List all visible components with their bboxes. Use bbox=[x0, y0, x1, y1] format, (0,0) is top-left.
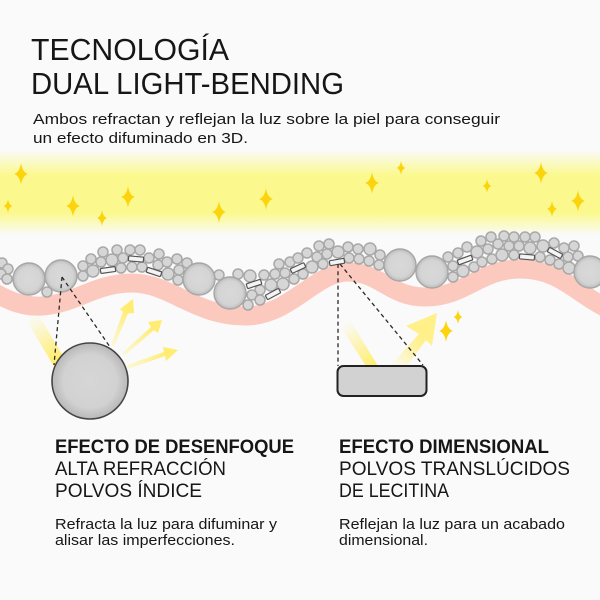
description: dimensional effect bbox=[339, 517, 565, 549]
flake particle enlarged bbox=[338, 366, 426, 396]
intro text: un efecto difuminado en 3D. bbox=[33, 130, 248, 147]
description: blur effect: alisar las imperfecciones. bbox=[55, 533, 235, 549]
skin layer bbox=[0, 269, 600, 316]
description: dimensional effect: dimensional. bbox=[339, 533, 428, 549]
subheading: translucent lecithin powders: DE LECITINA bbox=[339, 481, 449, 502]
sphere powder particle enlarged bbox=[52, 343, 128, 419]
intro text: Ambos refractan y reflejan la luz sobre la piel para conseguir bbox=[33, 111, 500, 128]
dashed zoom lines: sphere bbox=[54, 277, 110, 365]
icon: reflected sparkles bbox=[439, 310, 462, 342]
subheading: high refraction powders bbox=[55, 458, 226, 502]
large powder particles bbox=[13, 249, 600, 309]
icon: sparkles in light band bbox=[4, 161, 585, 226]
arrow: refracted light 2 bbox=[122, 320, 162, 356]
yellow light band bbox=[0, 150, 600, 235]
small powder particles bbox=[0, 231, 583, 310]
translucent lecithin flakes bbox=[100, 247, 563, 300]
dashed zoom lines: flake bbox=[338, 264, 423, 366]
subheading: high refraction powders: ALTA REFRACCIÓN bbox=[55, 458, 226, 480]
panel: blur effect text bbox=[55, 437, 294, 549]
heading: dimensional effect: EFECTO DIMENSIONAL bbox=[339, 437, 549, 458]
incoming light beam: blur effect bbox=[26, 314, 63, 368]
heading: blur effect: EFECTO DE DESENFOQUE bbox=[55, 437, 294, 458]
panel: dimensional effect text bbox=[339, 437, 570, 549]
arrow: refracted light 1 bbox=[111, 299, 134, 347]
description: blur effect: Refracta la luz para difuminar y bbox=[55, 517, 278, 533]
title: DUAL LIGHT-BENDING bbox=[31, 66, 344, 101]
subheading: translucent lecithin powders bbox=[339, 458, 570, 502]
description: blur effect bbox=[55, 517, 278, 549]
title: TECNOLOGÍA bbox=[31, 32, 229, 67]
arrow: refracted light 3 bbox=[127, 347, 178, 369]
description: dimensional effect: Reflejan la luz para un acabado bbox=[339, 517, 565, 533]
subheading: high refraction powders: POLVOS ÍNDICE bbox=[55, 481, 202, 502]
title bbox=[31, 32, 344, 101]
incoming light beam: dimensional effect bbox=[340, 320, 378, 366]
subheading: translucent lecithin powders: POLVOS TRANSLÚCIDOS bbox=[339, 458, 570, 480]
arrow: reflected light bbox=[390, 313, 437, 366]
intro text bbox=[33, 111, 500, 147]
